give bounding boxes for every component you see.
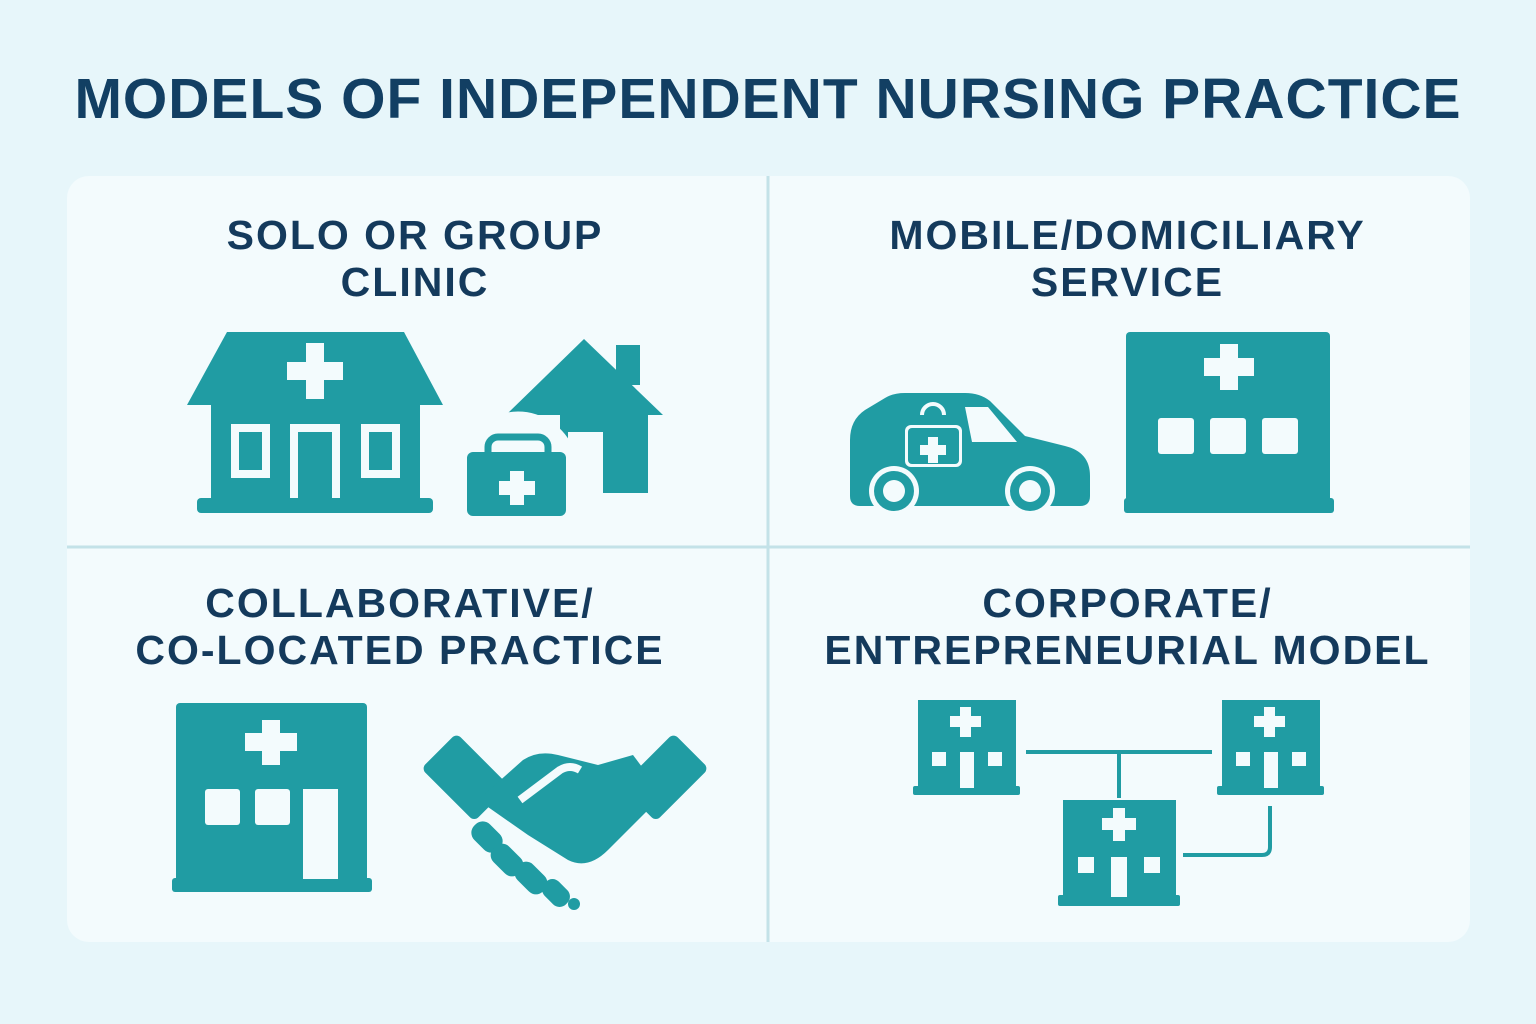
heading: solo or group clinic: SOLO OR GROUP <box>227 212 603 258</box>
heading: corporate: ENTREPRENEURIAL MODEL <box>824 627 1431 673</box>
icon: handshake <box>421 733 709 911</box>
heading: collaborative: CO-LOCATED PRACTICE <box>135 627 665 673</box>
heading: mobile/domiciliary: SERVICE <box>1031 259 1224 305</box>
heading: solo or group clinic <box>227 212 603 305</box>
heading: collaborative: COLLABORATIVE/ <box>205 580 595 626</box>
heading: corporate <box>824 580 1431 673</box>
heading: collaborative <box>135 580 665 673</box>
heading: solo or group clinic: CLINIC <box>341 259 489 305</box>
icon: network of clinics <box>913 700 1324 906</box>
heading: mobile/domiciliary <box>889 212 1366 305</box>
heading: mobile/domiciliary: MOBILE/DOMICILIARY <box>889 212 1366 258</box>
icon: building mobile <box>1124 332 1334 513</box>
title: MODELS OF INDEPENDENT NURSING PRACTICE <box>74 67 1462 131</box>
icon: clinic house <box>187 332 443 513</box>
main panel <box>67 176 1470 942</box>
icon: home with bag <box>462 339 663 520</box>
icon: car <box>850 393 1090 516</box>
icon: building collaborative <box>172 703 372 892</box>
heading: corporate: CORPORATE/ <box>982 580 1273 626</box>
